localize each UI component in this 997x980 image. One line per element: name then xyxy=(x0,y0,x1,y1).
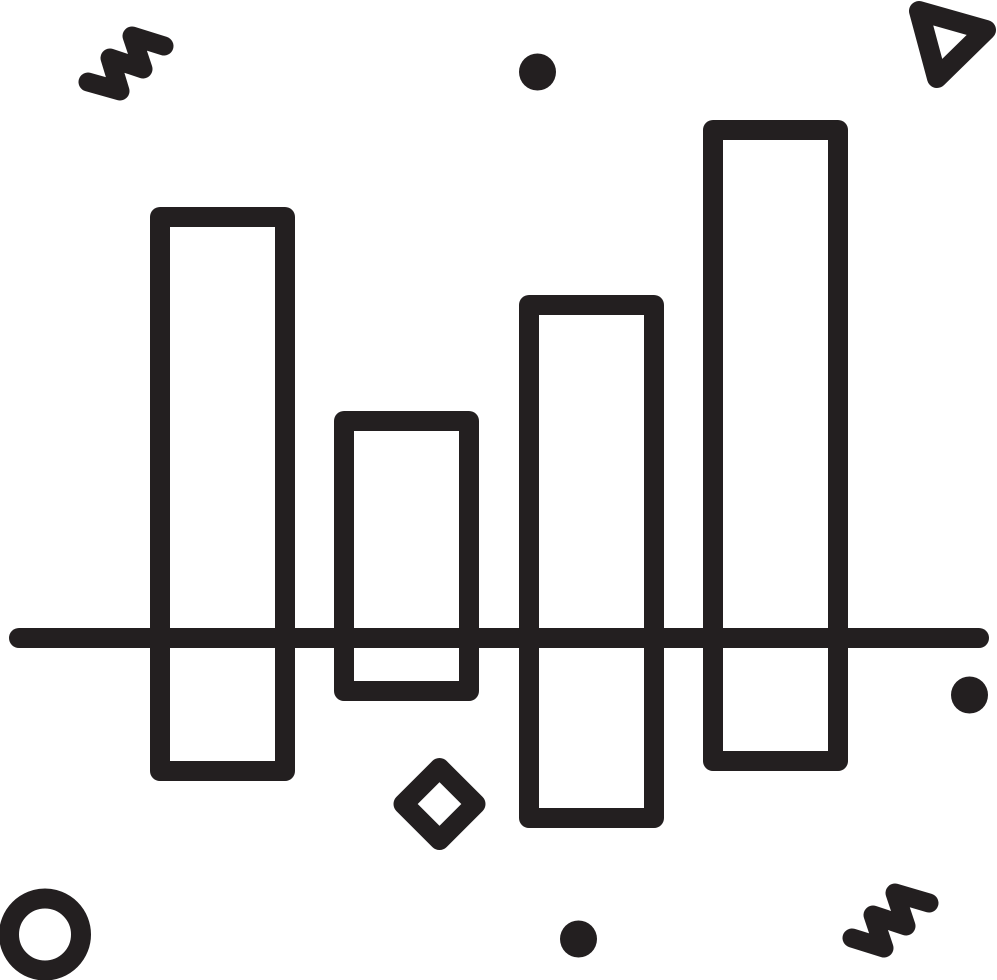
icon: zigzag bottom right xyxy=(852,893,929,948)
icon: dot bottom xyxy=(560,920,597,958)
icon: triangle top right xyxy=(919,11,986,78)
bar 4 xyxy=(713,130,838,761)
icon: diamond xyxy=(404,768,476,840)
icon: dot right xyxy=(951,676,988,714)
bar 1 xyxy=(160,217,285,771)
bar 3 xyxy=(529,305,654,818)
baseline axis xyxy=(19,628,979,648)
icon: zigzag top left xyxy=(88,36,164,91)
icon: ring bottom left xyxy=(9,898,81,970)
icon: dot top xyxy=(519,54,556,90)
bar 2 xyxy=(344,421,469,691)
bar chart xyxy=(19,130,979,818)
